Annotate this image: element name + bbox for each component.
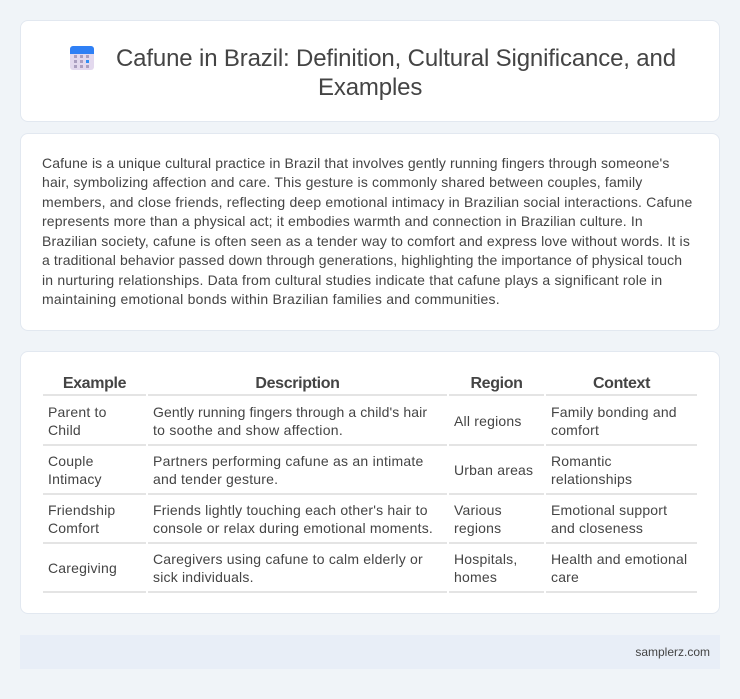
table header: Example bbox=[63, 375, 126, 392]
title: Examples bbox=[318, 74, 422, 101]
text block: definition paragraph: hair, symbolizing affection and care. This gesture is commonly shared between couples, family bbox=[42, 174, 642, 190]
table header bbox=[43, 375, 697, 396]
table row: caregiving: Caregiving bbox=[48, 560, 117, 576]
text block: definition paragraph: maintaining emotional bonds within Brazilian families and communities. bbox=[42, 291, 500, 307]
text block: definition paragraph: Cafune is a unique cultural practice in Brazil that involves gently running fingers through someone's bbox=[42, 155, 669, 171]
header panel bbox=[20, 20, 720, 122]
table row: friendship comfort: Emotional support bbox=[551, 502, 667, 518]
table row: couple intimacy bbox=[43, 453, 697, 495]
table row: parent to child: Parent to bbox=[48, 404, 107, 420]
table row: friendship comfort: Comfort bbox=[48, 520, 99, 536]
text block: definition paragraph: represents more than a physical act; it embodies warmth and connection in Brazilian culture. In bbox=[42, 213, 643, 229]
table row: couple intimacy: Intimacy bbox=[48, 471, 102, 487]
title: Cafune in Brazil: Definition, Cultural Significance, and bbox=[116, 45, 676, 72]
table row: parent to child: Family bonding and bbox=[551, 404, 677, 420]
table row: caregiving: care bbox=[551, 569, 579, 585]
table row: friendship comfort: console or relax during emotional moments. bbox=[153, 520, 433, 536]
table row: parent to child bbox=[43, 404, 697, 446]
icon: calendar bbox=[70, 46, 94, 70]
panel: examples table bbox=[20, 351, 720, 614]
title bbox=[116, 45, 676, 101]
table row: friendship comfort: Friends lightly touching each other's hair to bbox=[153, 502, 428, 518]
table row: parent to child: Gently running fingers through a child's hair bbox=[153, 404, 427, 420]
table row: caregiving bbox=[43, 551, 697, 593]
table row: couple intimacy: Partners performing cafune as an intimate bbox=[153, 453, 424, 469]
table header: Description bbox=[255, 375, 340, 392]
table row: couple intimacy: Urban areas bbox=[454, 462, 533, 478]
table row: couple intimacy: Couple bbox=[48, 453, 94, 469]
table row: parent to child: Child bbox=[48, 422, 81, 438]
table row: friendship comfort: Various bbox=[454, 502, 502, 518]
table row: friendship comfort bbox=[43, 502, 697, 544]
footer text: samplerz.com bbox=[635, 645, 710, 659]
text block: definition paragraph: members, and close friends, reflecting deep emotional intimacy in Brazilian social interactions. Cafune bbox=[42, 194, 692, 210]
table row: caregiving: sick individuals. bbox=[153, 569, 254, 585]
table row: friendship comfort: regions bbox=[454, 520, 501, 536]
table row: caregiving: Hospitals, bbox=[454, 551, 517, 567]
text block: definition paragraph: a traditional behavior passed down through generations, highlighting the importance of physical touch bbox=[42, 252, 682, 268]
table row: parent to child: All regions bbox=[454, 413, 522, 429]
table row: friendship comfort: and closeness bbox=[551, 520, 643, 536]
table row: caregiving: Caregivers using cafune to calm elderly or bbox=[153, 551, 423, 567]
table row: caregiving: homes bbox=[454, 569, 497, 585]
table row: couple intimacy: relationships bbox=[551, 471, 632, 487]
text block: definition paragraph: in nurturing relationships. Data from cultural studies indicate that cafune plays a significant role in bbox=[42, 272, 662, 288]
table row: parent to child: to soothe and show affection. bbox=[153, 422, 343, 438]
panel: definition bbox=[20, 133, 720, 331]
text block: definition paragraph bbox=[42, 155, 692, 307]
table header: Context bbox=[593, 375, 650, 392]
table row: couple intimacy: and tender gesture. bbox=[153, 471, 278, 487]
table header: Region bbox=[470, 375, 523, 392]
table row: parent to child: comfort bbox=[551, 422, 599, 438]
table row: couple intimacy: Romantic bbox=[551, 453, 612, 469]
table row: friendship comfort: Friendship bbox=[48, 502, 115, 518]
text block: definition paragraph: Brazilian society, cafune is often seen as a tender way to comfort and express love without words. It is bbox=[42, 233, 690, 249]
footer bar bbox=[20, 635, 720, 669]
table row: caregiving: Health and emotional bbox=[551, 551, 687, 567]
